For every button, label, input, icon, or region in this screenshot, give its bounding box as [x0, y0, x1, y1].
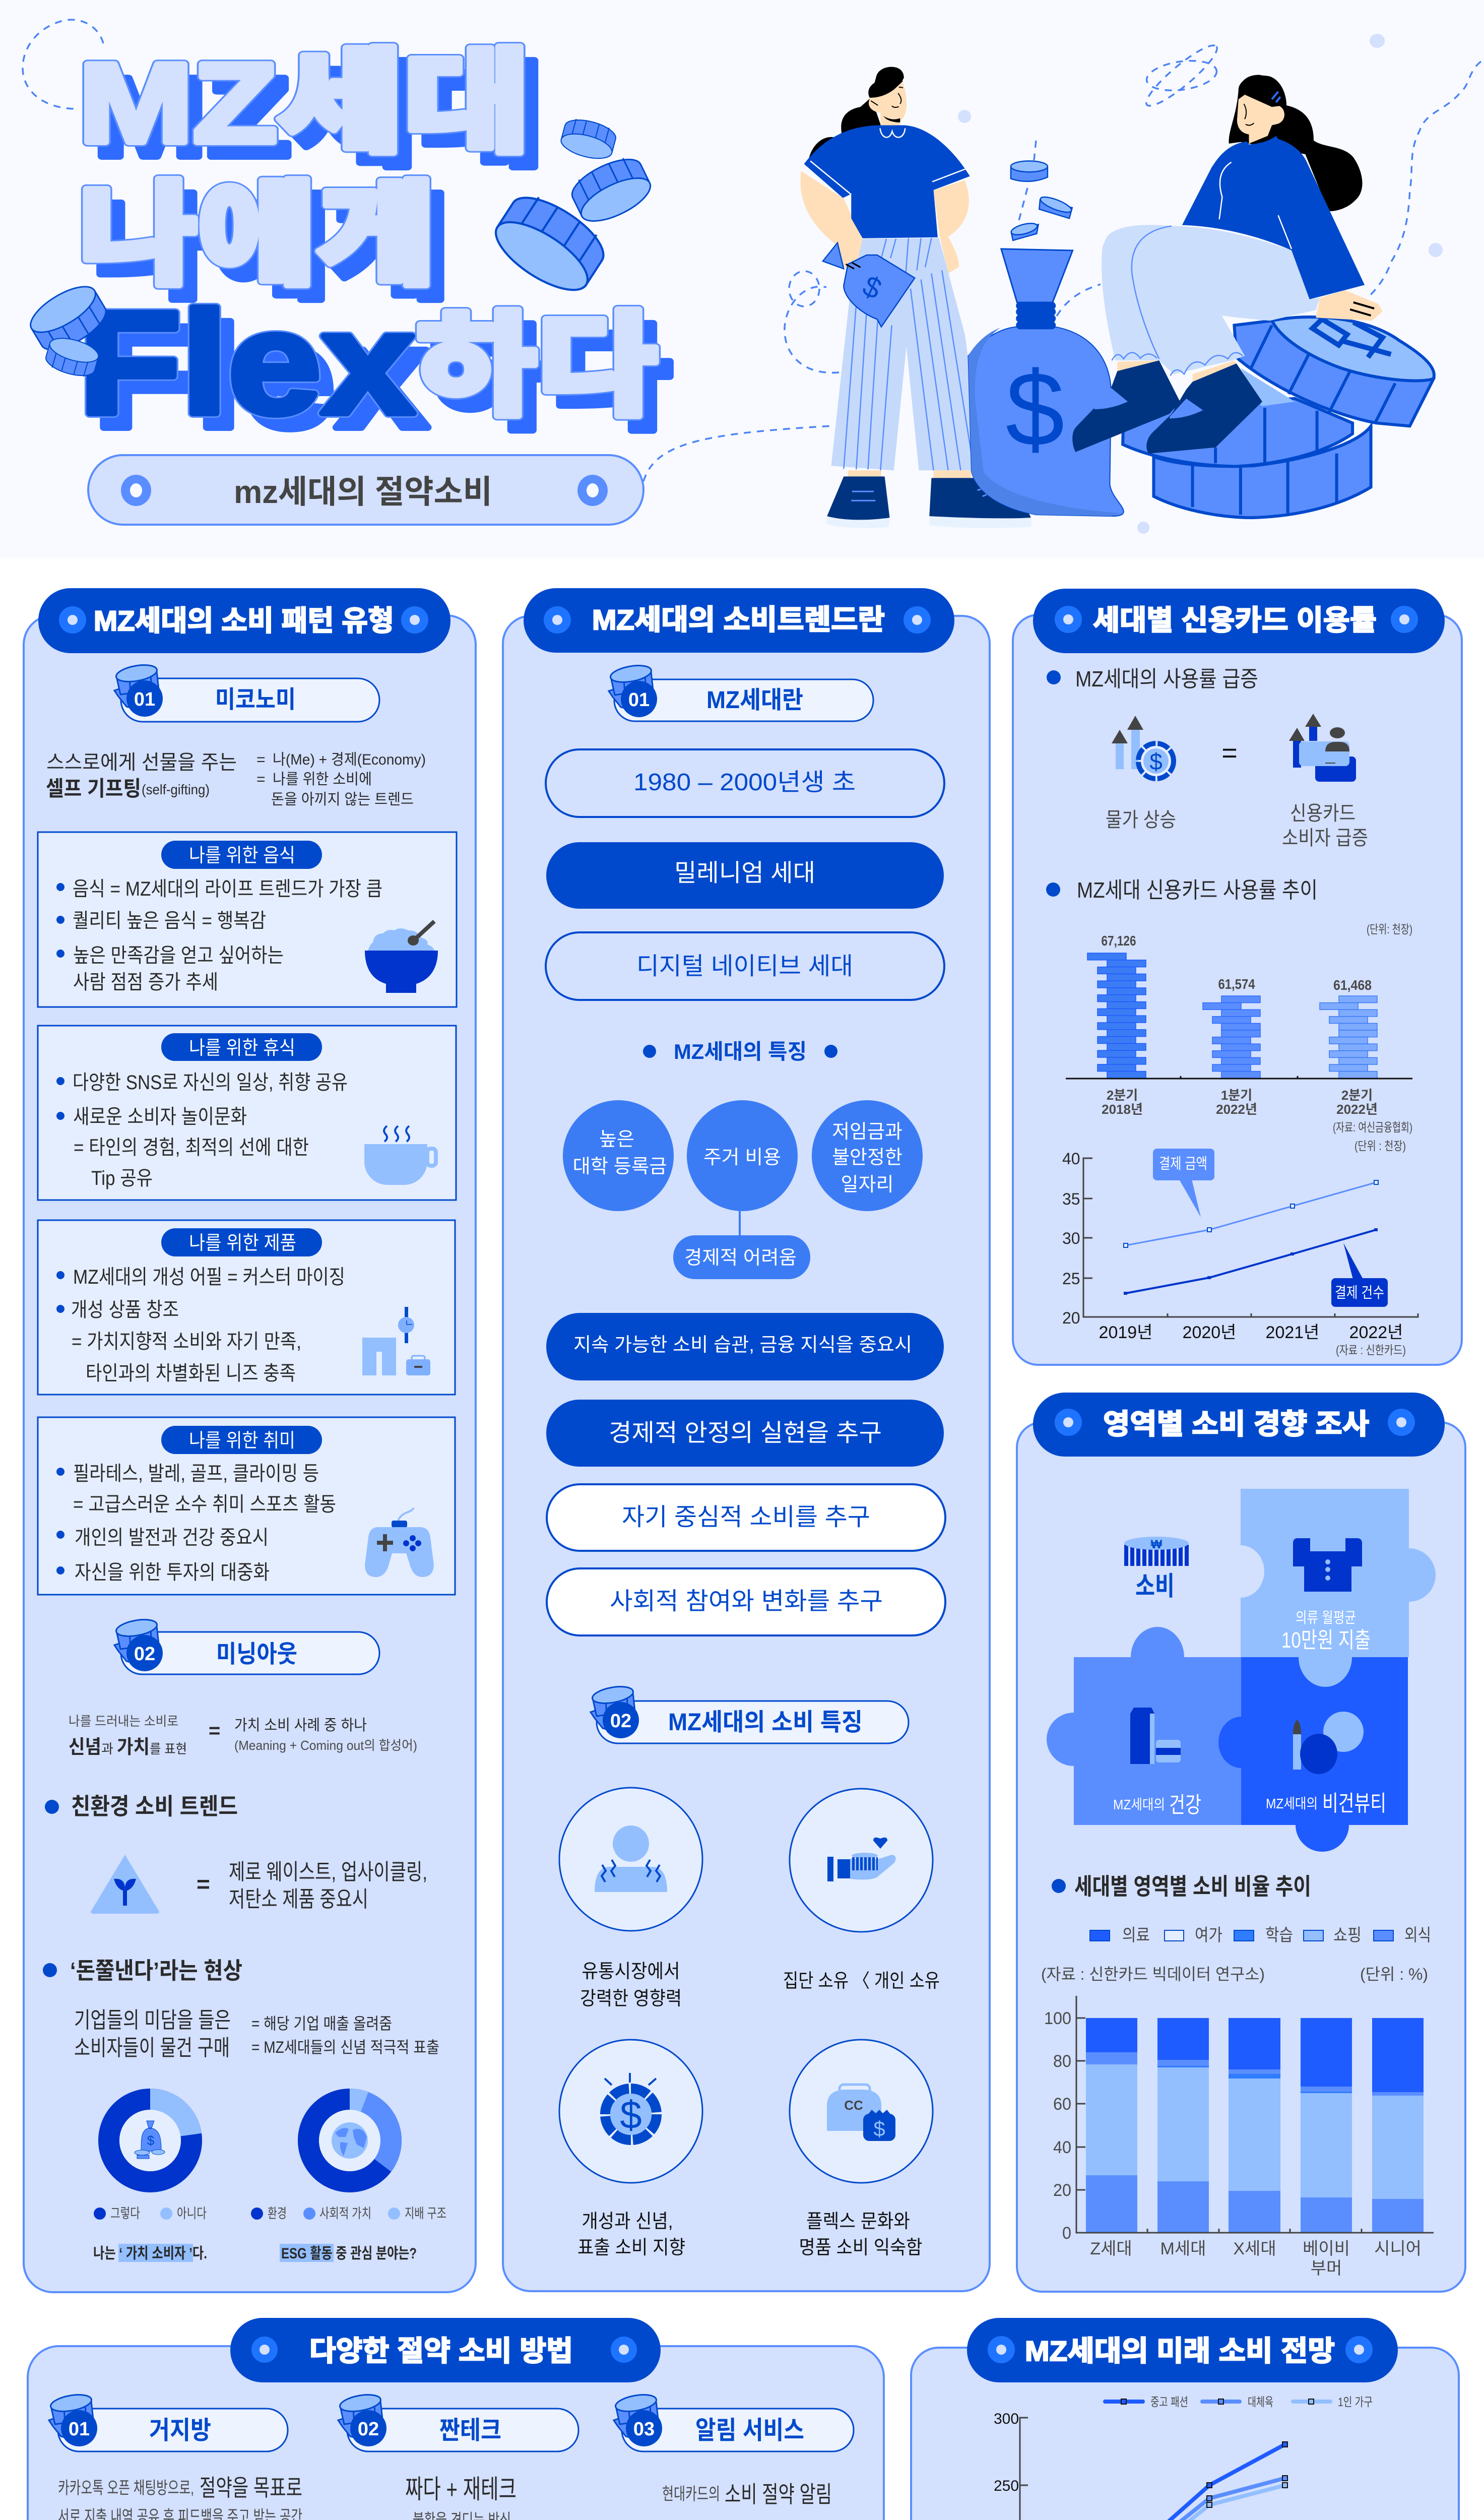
- chart: donut ESG: [308, 2099, 391, 2182]
- source note: (자료 : 신한카드 빅데이터 연구소): [1041, 1965, 1265, 1983]
- chart: stacked card bars: 1분기: [1221, 1088, 1252, 1103]
- text: zero waste: 저탄소 제품 중요시: [229, 1887, 368, 1912]
- text: self gifting definition: =: [256, 751, 266, 768]
- subheading: 01 MZ세대란: [609, 663, 873, 721]
- puzzle: beauty piece: [1218, 1657, 1408, 1852]
- label: 유통시장에서: [582, 1961, 680, 1982]
- legend: 쇼핑: [1333, 1926, 1362, 1945]
- puzzle: clothing piece: 의류 월평균: [1296, 1610, 1356, 1626]
- pill: birth years: [546, 749, 944, 817]
- chart: stacked card bars: 2022년: [1216, 1102, 1257, 1117]
- heading: MZ세대의 미래 소비 전망: [1025, 2335, 1335, 2367]
- text: self gifting definition: (self-gifting): [142, 782, 210, 797]
- heading: 영역별 소비 경향 조사: [1103, 1408, 1369, 1440]
- pill: 경제적 안정: 경제적 안정의 실현을 추구: [609, 1420, 882, 1446]
- heading: 돈쭐낸다: ‘돈쭐낸다’라는 현상: [70, 1958, 242, 1984]
- subtitle pill: [88, 455, 643, 525]
- subheading: 01 MZ세대란: 01: [628, 689, 650, 711]
- icon: pants, watch, bag: [362, 1307, 430, 1375]
- subheading: 01 미코노미: 01: [134, 689, 155, 710]
- hero section: [0, 0, 1484, 558]
- icon: dollar on money bag: $: [1006, 350, 1064, 468]
- chart: stacked card bars: 2분기: [1107, 1088, 1138, 1103]
- box: 나를 위한 휴식: Tip 공유: [91, 1167, 153, 1189]
- legend: [1105, 2396, 1373, 2409]
- text: self gifting definition: 셀프 기프팅: [46, 777, 141, 800]
- chart: stacked card bars: (단위: 천장): [1367, 923, 1412, 936]
- chart: stacked bar by generation: 베이비: [1303, 2239, 1350, 2258]
- illustration: two women, money bag and coins: [800, 67, 1434, 528]
- chart: stacked card bars: 2022년: [1336, 1102, 1378, 1117]
- chart: card line trend: 2021년: [1266, 1323, 1319, 1342]
- chart: stacked bar by generation: 시니어: [1374, 2239, 1422, 2258]
- text: zero waste: 제로 웨이스트, 업사이클링,: [229, 1860, 427, 1884]
- heading: MZ세대의 소비 패턴 유형: [94, 605, 394, 637]
- caption: value consumer: 나는 ‘ 가치 소비자 ’다.: [93, 2245, 207, 2262]
- description: 절약을 목표로: [200, 2475, 302, 2501]
- box: 나를 위한 제품: 나를 위한 제품: [189, 1233, 296, 1254]
- description: [58, 2475, 302, 2520]
- box: 나를 위한 휴식: 다양한 SNS로 자신의 일상, 취향 공유: [73, 1072, 348, 1094]
- pill: 사회적 참여: [547, 1568, 945, 1635]
- box: 나를 위한 제품: 타인과의 차별화된 니즈 충족: [86, 1362, 296, 1384]
- chart: card line trend: 30: [1062, 1229, 1080, 1247]
- text: self gifting definition: =: [256, 771, 266, 788]
- box: 나를 위한 휴식: 새로운 소비자 놀이문화: [73, 1106, 247, 1128]
- icon circle: coin rays: [559, 2040, 702, 2183]
- text: self gifting definition: 나(Me) + 경제(Economy): [273, 751, 426, 768]
- icon: dollar on small bag: $: [858, 269, 886, 306]
- box: 나를 위한 휴식: = 타인의 경험, 최적의 선에 대한: [74, 1137, 309, 1159]
- chart: stacked bar by generation: X세대: [1233, 2239, 1276, 2258]
- box: 나를 위한 휴식: 나를 위한 휴식: [189, 1038, 295, 1059]
- chart: stacked bar by generation: [1044, 1996, 1434, 2278]
- box: 나를 위한 음식: 퀄리티 높은 음식 = 행복감: [73, 910, 266, 932]
- chart: stacked bar by generation: 100: [1044, 2009, 1071, 2028]
- box: 나를 위한 음식: 높은 만족감을 얻고 싶어하는: [73, 944, 284, 967]
- chart: card line trend: (단위 : 천장): [1354, 1140, 1406, 1153]
- text: meaning out definition: 신념: [69, 1737, 101, 1758]
- chart: card line trend: 2020년: [1183, 1323, 1236, 1342]
- title: MZ세대 나에게 Flex하다: Flex: [93, 295, 430, 459]
- icon: sprout triangle: [91, 1855, 159, 1914]
- icon: rice bowl: [365, 921, 438, 993]
- subheading: [338, 2392, 578, 2451]
- chart: stacked bar by generation: 80: [1053, 2052, 1071, 2071]
- heading: 세대별 신용카드 이용률: [1093, 604, 1377, 636]
- icon: price up: $: [1149, 748, 1163, 775]
- chart: stacked bar by generation: M세대: [1160, 2239, 1206, 2258]
- heading: MZ세대의 소비트렌드란: [592, 604, 885, 636]
- pill: millennial: 밀레니엄 세대: [674, 860, 815, 887]
- icon: coffee cup: [364, 1126, 436, 1185]
- text: 돈쭐 description: 기업들의 미담을 들은: [74, 2008, 231, 2033]
- bullet heading: 세대별 영역별 소비 비율 추이: [1074, 1873, 1311, 1900]
- subheading: 02 미닝아웃: 02: [134, 1644, 155, 1665]
- panel: MZ세대의 소비트렌드란: [503, 588, 990, 2291]
- labels: 소비자 급증: [1282, 827, 1368, 849]
- pill: digital native: 디지털 네이티브 세대: [636, 953, 853, 980]
- source note: [1041, 1965, 1428, 1983]
- icon circle: luxury bag: [790, 2040, 933, 2183]
- title: MZ세대 나에게 Flex하다: MZ세대: [79, 39, 530, 166]
- text: self gifting definition: [46, 751, 426, 808]
- text: 돈쭐 description: = 해당 기업 매출 올려줌: [251, 2014, 392, 2033]
- legend: 학습: [1265, 1926, 1293, 1945]
- chart: stacked card bars: 67,126: [1102, 933, 1136, 949]
- chart: stacked card bars: [1066, 923, 1412, 1135]
- chart: card line trend: 2019년: [1099, 1323, 1152, 1342]
- text: 돈쭐 description: = MZ세대들의 신념 적극적 표출: [251, 2038, 439, 2056]
- illustration: coin stack and falling coins: [1009, 161, 1434, 518]
- icon: game controller: [365, 1508, 434, 1577]
- pill: 자기 중심적: [547, 1484, 945, 1551]
- chart: card line trend: 25: [1062, 1270, 1080, 1288]
- heading: [230, 2318, 661, 2382]
- legend: [1090, 1926, 1431, 1945]
- box: 나를 위한 취미: 자신을 위한 투자의 대중화: [75, 1561, 270, 1584]
- source note: (단위 : %): [1360, 1965, 1428, 1983]
- chart: stacked card bars: 61,574: [1218, 976, 1255, 992]
- label: 개성과 신념,: [582, 2211, 673, 2232]
- subheading: 01: [69, 2419, 90, 2440]
- title: MZ세대 나에게 Flex하다: 나에게: [79, 172, 435, 299]
- text: zero waste: =: [197, 1871, 210, 1897]
- box: 나를 위한 취미: = 고급스러운 소수 취미 스포츠 활동: [73, 1493, 336, 1516]
- puzzle: consumption coin: ₩: [1151, 1538, 1163, 1551]
- bar: 2022 Q1: [1203, 996, 1260, 1078]
- text: meaning out definition: 를 표현: [150, 1741, 187, 1756]
- diagram: economic difficulty circles: 대학 등록금: [572, 1156, 667, 1177]
- label: 집단 소유 〈 개인 소유: [783, 1971, 940, 1992]
- puzzle: clothing piece: [1217, 1489, 1436, 1657]
- pill: 경제적 안정: [546, 1400, 944, 1467]
- heading: 친환경 소비 트렌드: 친환경 소비 트렌드: [71, 1793, 238, 1819]
- icon: globe: [332, 2122, 368, 2159]
- text: self gifting definition: 나를 위한 소비에: [273, 771, 372, 788]
- title: MZ세대 나에게 Flex하다: 하다: [430, 317, 672, 444]
- subheading: 02 미닝아웃: [114, 1617, 379, 1674]
- legend: 중고 패션: [1150, 2396, 1188, 2409]
- title: MZ세대 나에게 Flex하다: 하다: [416, 302, 658, 429]
- text: meaning out definition: 나를 드러내는 소비로: [69, 1714, 178, 1729]
- subheading: [614, 2392, 854, 2451]
- box: 나를 위한 제품: [38, 1220, 455, 1395]
- legend: donut 2: 사회적 가치: [319, 2206, 371, 2221]
- title: MZ세대 나에게 Flex하다: 나에게: [93, 186, 449, 313]
- column: 거지방: [49, 2392, 302, 2520]
- box: 나를 위한 음식: 나를 위한 음식: [189, 845, 295, 866]
- puzzle diagram: [1047, 1489, 1436, 1852]
- diagram: economic difficulty circles: 높은: [599, 1129, 634, 1150]
- icon circle: coin rays: $: [620, 2093, 642, 2137]
- title: MZ세대 나에게 Flex하다: Flex: [79, 281, 416, 445]
- text: zero waste: [197, 1860, 427, 1912]
- label: 표출 소비 지향: [577, 2237, 685, 2258]
- chart: future consumption lines: 250: [994, 2478, 1019, 2494]
- chart: card line trend: 40: [1062, 1150, 1080, 1168]
- text: 돈쭐 description: 소비자들이 물건 구매: [74, 2036, 230, 2060]
- panel: 영역별 소비 경향 조사: [1017, 1393, 1465, 2292]
- box: 나를 위한 취미: 나를 위한 취미: [189, 1430, 295, 1452]
- bullet heading: MZ세대 신용카드 사용률 추이: [1077, 878, 1318, 903]
- subheading: 01 미코노미: 미코노미: [215, 686, 296, 713]
- pill: birth years: 1980 – 2000년생 초: [633, 769, 856, 796]
- description: [405, 2475, 517, 2520]
- description: 짜다 + 재테크: [405, 2475, 517, 2504]
- puzzle: health piece: MZ세대의: [1113, 1797, 1165, 1812]
- bullet heading: MZ세대의 사용률 급증: [1075, 667, 1258, 691]
- column: 짠테크: [338, 2392, 578, 2520]
- subheading: 짠테크: [439, 2416, 501, 2444]
- puzzle: health piece: 건강: [1169, 1793, 1201, 1817]
- description: 카카오톡 오픈 채팅방으로,: [58, 2479, 194, 2498]
- diagram: economic difficulty circles: 주거 비용: [703, 1147, 781, 1168]
- puzzle: consumption coin: 소비: [1135, 1572, 1175, 1601]
- labels: 물가 상승: [1106, 809, 1176, 831]
- column: 알림 서비스: [614, 2392, 854, 2520]
- subheading: 알림 서비스: [695, 2416, 804, 2444]
- pill: 사회적 참여: 사회적 참여와 변화를 추구: [610, 1588, 883, 1615]
- heading: MZ세대의 특징: MZ세대의 특징: [674, 1040, 807, 1063]
- caption: ESG: ESG 활동 중 관심 분야는?: [281, 2245, 417, 2262]
- bars: [1086, 2018, 1424, 2233]
- subheading: 02 미닝아웃: 미닝아웃: [216, 1641, 297, 1668]
- icon: mini money bag: [135, 2121, 165, 2159]
- subheading: 01 MZ세대란: MZ세대란: [706, 687, 803, 714]
- chart: stacked bar by generation: Z세대: [1090, 2239, 1132, 2258]
- diagram: economic difficulty circles: 경제적 어려움: [684, 1247, 797, 1269]
- box: 나를 위한 취미: 개인의 발전과 건강 중요시: [75, 1527, 269, 1549]
- pill: 자기 중심적: 자기 중심적 소비를 추구: [622, 1504, 870, 1531]
- legend: donut 2: 환경: [268, 2206, 287, 2221]
- equals sign: =: [1221, 738, 1238, 768]
- chart: stacked card bars: 2분기: [1341, 1088, 1373, 1103]
- illustration: right woman: [1072, 75, 1383, 454]
- title: MZ세대 나에게 Flex하다: [79, 39, 672, 459]
- icon circle: luxury bag: $: [873, 2117, 885, 2140]
- text: self gifting definition: 스스로에게 선물을 주는: [46, 751, 237, 774]
- heading: [524, 588, 954, 653]
- label: [580, 1961, 682, 2009]
- subheading: 02 MZ세대의 소비 특징: MZ세대의 소비 특징: [668, 1709, 863, 1736]
- box: 나를 위한 제품: = 가치지향적 소비와 자기 만족,: [72, 1331, 301, 1353]
- chart: stacked card bars: (자료: 여신금융협회): [1333, 1121, 1412, 1135]
- icon circle: collective ownership: [790, 1789, 933, 1932]
- chart: stacked bar by generation: 40: [1053, 2138, 1071, 2157]
- heading: 다양한 절약 소비 방법: [309, 2335, 573, 2367]
- decorative dashed lines: [23, 20, 1481, 481]
- box: 나를 위한 음식: 음식 = MZ세대의 라이프 트렌드가 가장 큼: [73, 878, 382, 900]
- legend: 여가: [1195, 1926, 1222, 1945]
- legend: donut 1: 아니다: [177, 2206, 207, 2221]
- box: 나를 위한 음식: 사람 점점 증가 추세: [73, 971, 218, 993]
- subheading: 02: [358, 2419, 379, 2440]
- puzzle: clothing piece: 10만원 지출: [1281, 1628, 1371, 1653]
- chart: card line trend: (자료 : 신한카드): [1336, 1344, 1406, 1357]
- subtitle pill: mz세대의 절약소비: [234, 474, 492, 510]
- chart: card line trend: 35: [1062, 1190, 1080, 1208]
- illustration: left woman: [800, 67, 1031, 528]
- chart: stacked card bars: 61,468: [1333, 977, 1372, 993]
- panel: 세대별 신용카드 이용률: [1013, 589, 1462, 1365]
- title: MZ세대 나에게 Flex하다: MZ세대: [79, 39, 530, 166]
- chart: stacked card bars: 2018년: [1102, 1102, 1143, 1117]
- label: 명품 소비 익숙함: [799, 2237, 922, 2258]
- box: 나를 위한 취미: 필라테스, 발레, 골프, 클라이밍 등: [73, 1463, 319, 1485]
- text: self gifting definition: 돈을 아끼지 않는 트렌드: [271, 791, 414, 808]
- legend: donut 1: 그렇다: [110, 2206, 140, 2221]
- box: 나를 위한 취미: [38, 1417, 455, 1595]
- legend: donut 1: [94, 2206, 207, 2221]
- box: 나를 위한 제품: MZ세대의 개성 어필 = 커스터 마이징: [73, 1266, 345, 1288]
- box: 나를 위한 휴식: [38, 1026, 456, 1200]
- chart: card line trend: [1062, 1140, 1418, 1357]
- text: meaning out definition: (Meaning + Coming out의 합성어): [234, 1738, 417, 1753]
- icon: card users up: [1289, 714, 1356, 782]
- panel: MZ세대의 미래 소비 전망: [911, 2318, 1459, 2520]
- label: 플렉스 문화와: [806, 2211, 910, 2232]
- panel: 다양한 절약 소비 방법: [28, 2318, 884, 2520]
- box: 나를 위한 제품: 개성 상품 창조: [71, 1299, 179, 1321]
- heading: [967, 2318, 1398, 2382]
- heading: MZ세대의 특징: [643, 1040, 837, 1063]
- description: [662, 2481, 832, 2507]
- title: MZ세대 나에게 Flex하다: Flex: [79, 281, 416, 445]
- puzzle: health piece: [1047, 1627, 1241, 1825]
- text: 돈쭐 description: [74, 2008, 439, 2060]
- icon: mini money bag: $: [147, 2133, 155, 2148]
- chart: stacked bar by generation: 60: [1053, 2095, 1071, 2114]
- diagram: economic difficulty circles: 저임금과: [832, 1121, 902, 1143]
- pill: 금융 지식: [546, 1313, 944, 1380]
- bar: 2022 Q2: [1320, 996, 1377, 1078]
- title: MZ세대 나에게 Flex하다: MZ세대: [93, 53, 544, 180]
- labels: [1106, 802, 1368, 849]
- chart: stacked bar by generation: 20: [1053, 2181, 1071, 2200]
- heading: [38, 588, 450, 653]
- panel: MZ세대의 소비 패턴 유형: [24, 588, 476, 2292]
- chart: donut value consumer: [109, 2099, 191, 2182]
- diagram: economic difficulty circles: 불안정한: [832, 1147, 902, 1168]
- pill: 금융 지식: 지속 가능한 소비 습관, 금융 지식을 중요시: [573, 1335, 912, 1356]
- title: MZ세대 나에게 Flex하다: 하다: [416, 302, 658, 429]
- labels: 신용카드: [1290, 802, 1356, 825]
- diagram: economic difficulty circles: 일자리: [841, 1174, 893, 1195]
- icon circle: influence: [559, 1788, 702, 1931]
- heading: [1033, 589, 1445, 653]
- subheading: 거지방: [149, 2416, 211, 2444]
- subheading: 02 MZ세대의 소비 특징: [591, 1684, 909, 1743]
- puzzle: beauty piece: 비건뷰티: [1322, 1791, 1386, 1816]
- icon: price up: [1112, 716, 1174, 779]
- icon circle: luxury bag: CC: [844, 2098, 863, 2113]
- box: 나를 위한 음식: [38, 832, 457, 1007]
- description: 소비 절약 알림: [725, 2481, 832, 2507]
- label: 강력한 영향력: [580, 1988, 682, 2009]
- diagram: economic difficulty circles: [563, 1100, 923, 1279]
- label: [799, 2211, 922, 2258]
- description: 현대카드의: [662, 2485, 720, 2504]
- legend: 대체육: [1248, 2396, 1273, 2409]
- subheading: 02 MZ세대의 소비 특징: 02: [610, 1711, 631, 1732]
- bar: 2018: [1087, 953, 1146, 1078]
- legend: 의료: [1122, 1926, 1150, 1945]
- title: MZ세대 나에게 Flex하다: 나에게: [79, 172, 435, 299]
- chart: future consumption lines: [994, 2411, 1323, 2520]
- pill: millennial: [546, 842, 944, 909]
- chart: card line trend: 20: [1062, 1309, 1080, 1327]
- pill: digital native: [546, 932, 944, 1000]
- text: meaning out definition: 과: [101, 1741, 113, 1756]
- illustration: money bag: [968, 249, 1124, 516]
- legend: 1인 가구: [1338, 2396, 1373, 2409]
- subheading: 01 미코노미: [114, 662, 379, 722]
- subheading: 03: [633, 2419, 655, 2440]
- subheading: [49, 2392, 288, 2451]
- text: meaning out definition: 가치 소비 사례 중 하나: [234, 1717, 367, 1734]
- legend: donut 2: [251, 2206, 446, 2221]
- heading: [1033, 1393, 1445, 1457]
- decorative ovals: [958, 34, 1443, 534]
- text: meaning out definition: 가치: [117, 1737, 150, 1758]
- chart: future consumption lines: 300: [994, 2411, 1019, 2427]
- text: meaning out definition: =: [209, 1720, 220, 1742]
- callout: 결제 건수: [1331, 1243, 1388, 1307]
- puzzle: consumption coin: [1124, 1537, 1189, 1601]
- legend: 외식: [1404, 1926, 1431, 1945]
- chart: card line trend: 2022년: [1349, 1323, 1403, 1342]
- text: meaning out definition: [69, 1714, 417, 1758]
- label: [577, 2211, 685, 2258]
- chart: stacked bar by generation: 0: [1062, 2224, 1071, 2243]
- callout: 결제 건수: 결제 건수: [1335, 1285, 1384, 1301]
- legend: donut 2: 지배 구조: [405, 2206, 446, 2221]
- callout: 결제 금액: [1153, 1149, 1214, 1217]
- puzzle: beauty piece: MZ세대의: [1266, 1796, 1318, 1811]
- floating coins: [24, 115, 657, 380]
- callout: 결제 금액: 결제 금액: [1159, 1156, 1207, 1172]
- chart: stacked bar by generation: 부머: [1311, 2259, 1342, 2278]
